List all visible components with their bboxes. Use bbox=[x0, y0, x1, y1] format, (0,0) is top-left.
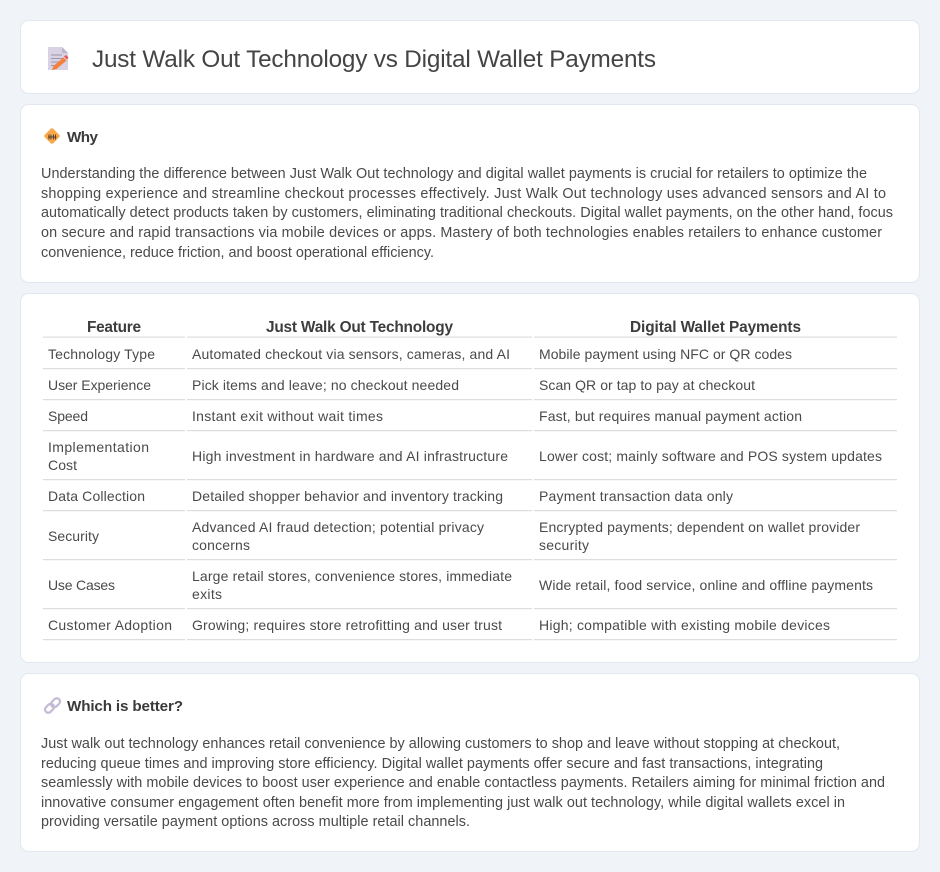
text block: which is better bbox=[41, 736, 885, 830]
row: implementation cost: Implementation bbox=[48, 439, 149, 455]
row: security bbox=[48, 519, 860, 553]
row: implementation cost: High investment in hardware and AI infrastructure bbox=[192, 448, 508, 464]
heading: which is better: Which is better? bbox=[67, 698, 183, 715]
heading: why: Why bbox=[67, 129, 99, 146]
row: speed: Fast, but requires manual payment action bbox=[539, 408, 802, 424]
row: security: security bbox=[539, 537, 589, 553]
row: customer adoption: Growing; requires store retrofitting and user trust bbox=[192, 617, 502, 633]
title: Just Walk Out Technology vs Digital Wallet Payments bbox=[92, 46, 656, 73]
text block: why: on secure and rapid transactions via mobile devices or apps. Mastery of both technologies enables retailers to enhance customer bbox=[41, 225, 882, 241]
row: use cases: Large retail stores, convenience stores, immediate bbox=[192, 568, 512, 584]
row: speed bbox=[48, 408, 802, 424]
row: data collection bbox=[48, 488, 733, 504]
row: security: concerns bbox=[192, 537, 250, 553]
row: customer adoption bbox=[48, 617, 830, 633]
table header row: Digital Wallet Payments bbox=[630, 319, 801, 336]
row: data collection: Payment transaction data only bbox=[539, 488, 733, 504]
row: use cases: exits bbox=[192, 586, 222, 602]
panel: header bbox=[20, 20, 920, 94]
row: speed: Instant exit without wait times bbox=[192, 408, 383, 424]
panel: why bbox=[20, 104, 920, 282]
icon: link bbox=[44, 697, 61, 714]
table header row: Feature bbox=[87, 319, 141, 336]
row: security: Security bbox=[48, 528, 99, 544]
row: technology type bbox=[48, 346, 792, 362]
icon: warning diamond with children bbox=[44, 128, 60, 144]
text block: which is better: Just walk out technology enhances retail convenience by allowing customers to shop and leave without stopping at checkout, bbox=[41, 736, 840, 752]
row: user experience: User Experience bbox=[48, 377, 151, 393]
row: use cases: Wide retail, food service, online and offline payments bbox=[539, 577, 873, 593]
row: user experience bbox=[48, 377, 755, 393]
row: security: Encrypted payments; dependent on wallet provider bbox=[539, 519, 860, 535]
text block: why: Understanding the difference between Just Walk Out technology and digital wallet payments is crucial for retailers to optimize the bbox=[41, 166, 867, 182]
row: data collection: Detailed shopper behavior and inventory tracking bbox=[192, 488, 503, 504]
row: use cases bbox=[48, 568, 873, 602]
row: implementation cost bbox=[48, 439, 882, 473]
row: implementation cost: Lower cost; mainly software and POS system updates bbox=[539, 448, 882, 464]
text block: why: automatically detect products taken by customers, eliminating traditional checkouts. Digital wallet payments, on the other hand, focus bbox=[41, 205, 893, 221]
row: security: Advanced AI fraud detection; potential privacy bbox=[192, 519, 484, 535]
row: data collection: Data Collection bbox=[48, 488, 145, 504]
text block: why: convenience, reduce friction, and boost operational efficiency. bbox=[41, 245, 434, 261]
panel: which is better bbox=[20, 674, 920, 852]
row: technology type: Technology Type bbox=[48, 346, 155, 362]
row: speed: Speed bbox=[48, 408, 88, 424]
row: user experience: Scan QR or tap to pay at checkout bbox=[539, 377, 755, 393]
text block: why bbox=[41, 166, 893, 261]
text block: which is better: providing versatile payment options across multiple retail channels. bbox=[41, 814, 470, 830]
row: technology type: Mobile payment using NFC or QR codes bbox=[539, 346, 792, 362]
row: customer adoption: Customer Adoption bbox=[48, 617, 172, 633]
row: use cases: Use Cases bbox=[48, 577, 115, 593]
text block: which is better: seamlessly with mobile devices to boost user experience and enable contactless payments. Retailers aiming for minimal friction and bbox=[41, 775, 885, 791]
row: customer adoption: High; compatible with existing mobile devices bbox=[539, 617, 830, 633]
table header row bbox=[87, 319, 801, 336]
icon: memo with pencil bbox=[48, 47, 68, 70]
panel: comparison table bbox=[20, 294, 920, 662]
table header row: Just Walk Out Technology bbox=[266, 319, 453, 336]
row: user experience: Pick items and leave; no checkout needed bbox=[192, 377, 459, 393]
text block: why: shopping experience and streamline checkout processes effectively. Just Walk Out technology uses advanced sensors and AI to bbox=[41, 186, 886, 202]
row: technology type: Automated checkout via sensors, cameras, and AI bbox=[192, 346, 510, 362]
row: implementation cost: Cost bbox=[48, 457, 77, 473]
text block: which is better: innovative consumer engagement often benefit more from implementing just walk out technology, while digital wallets excel in bbox=[41, 795, 845, 811]
text block: which is better: reducing queue times and improving store efficiency. Digital wallet payments offer secure and fast transactions, integrating bbox=[41, 756, 823, 772]
